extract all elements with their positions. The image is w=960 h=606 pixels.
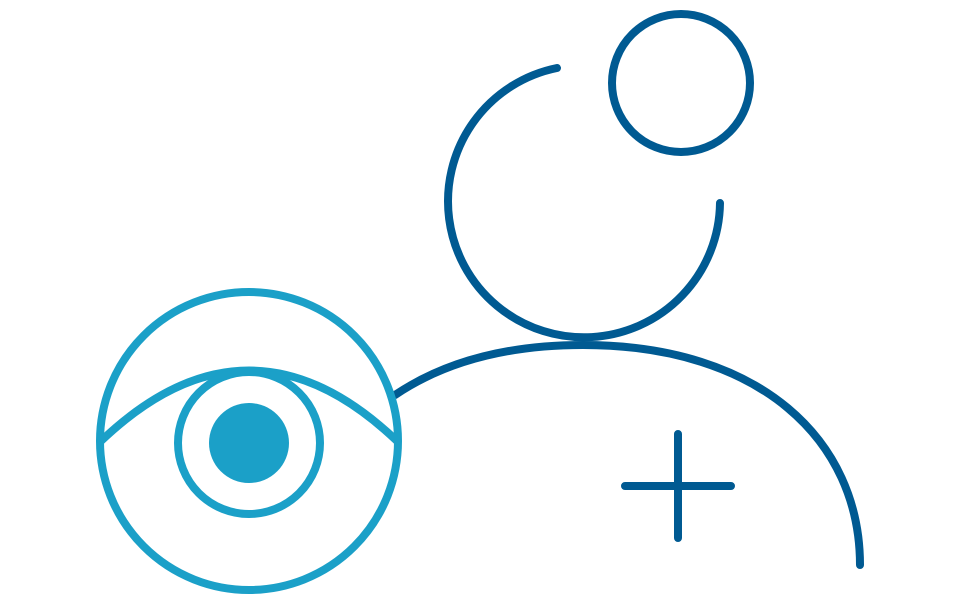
icon: plus sign xyxy=(625,434,731,538)
eye outer circle xyxy=(100,292,398,590)
pupil xyxy=(209,403,289,483)
iris xyxy=(178,372,320,514)
icon: small circle xyxy=(612,14,750,152)
icon: eye xyxy=(100,292,398,590)
eyelid xyxy=(101,370,397,441)
icon: person body curve xyxy=(395,345,860,565)
icon: person head arc xyxy=(448,68,720,337)
